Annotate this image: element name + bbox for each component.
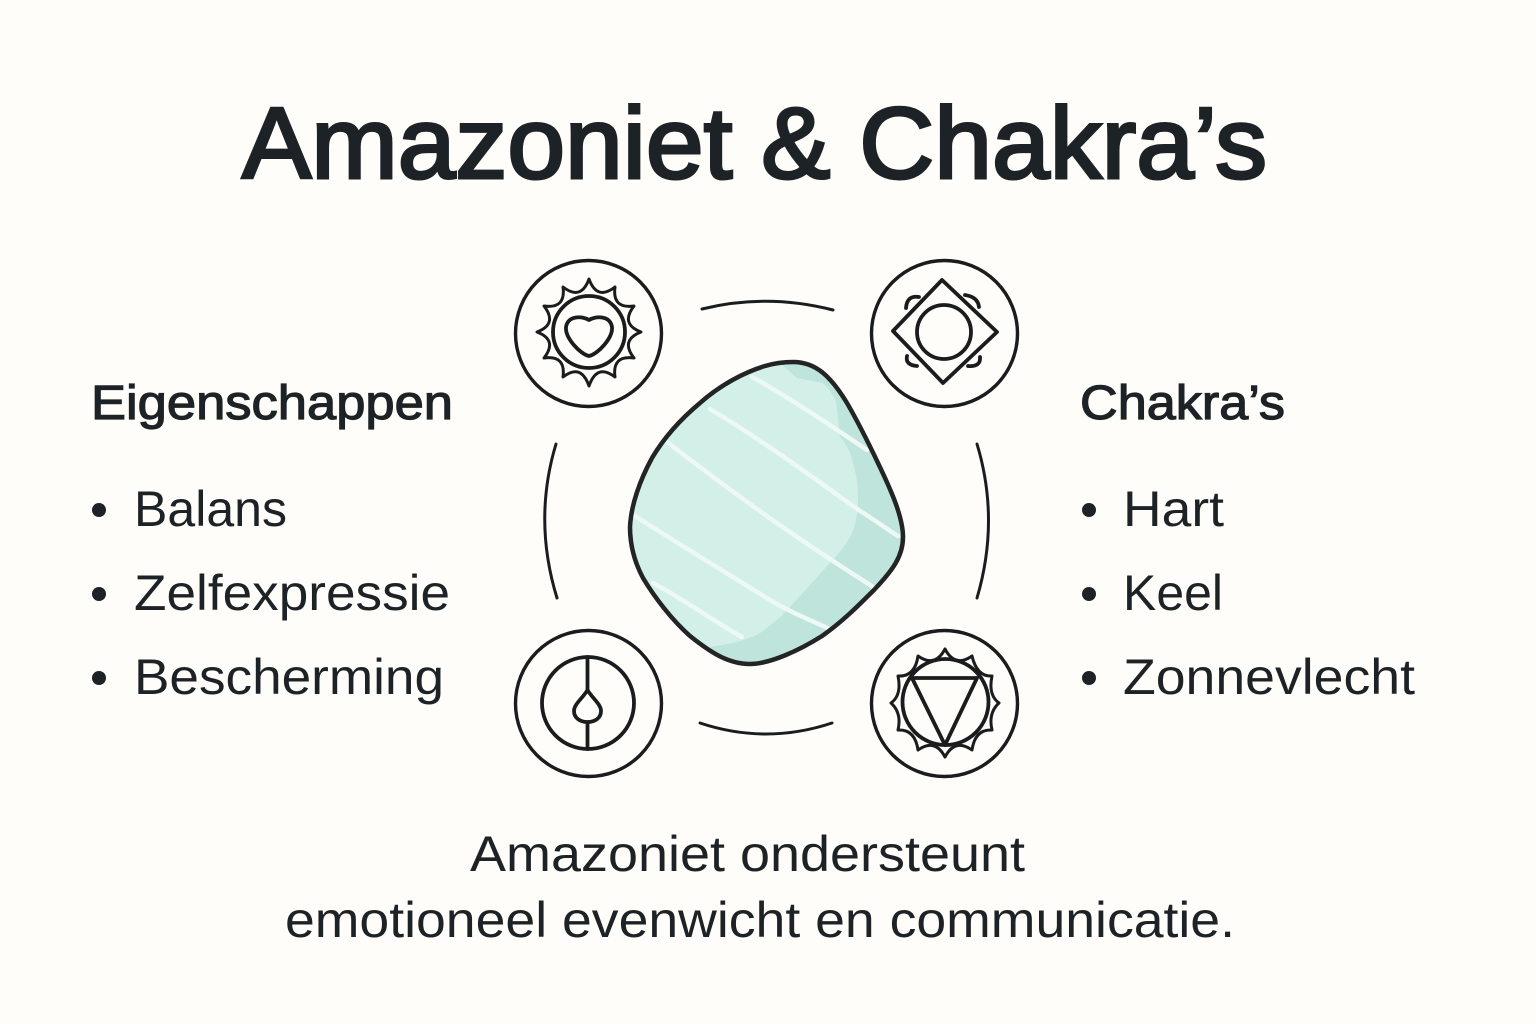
title: Amazoniet & Chakra’s [242, 88, 1267, 200]
arc: left connector [545, 444, 557, 598]
list item: keel: Keel [1123, 565, 1223, 621]
amazonite stone [630, 350, 920, 670]
list item: hart [1082, 481, 1224, 537]
icon: throat chakra [872, 260, 1018, 406]
icon: heart chakra [516, 260, 662, 406]
list item: zelfexpressie: Zelfexpressie [134, 565, 450, 621]
heading: chakra's: Chakra’s [1080, 377, 1285, 430]
arc: right connector [977, 444, 988, 598]
list item: balans: Balans [134, 481, 287, 537]
list item: hart: Hart [1123, 481, 1224, 537]
arc: bottom connector [700, 723, 832, 734]
arc: top connector [702, 301, 833, 310]
panel: eigenschappen [91, 377, 453, 705]
panel: chakra's [1080, 377, 1415, 705]
list item: zonnevlecht: Zonnevlecht [1123, 649, 1415, 705]
closing statement: emotioneel evenwicht en communicatie. [285, 892, 1235, 948]
icon: drop chakra [516, 630, 662, 776]
heading: eigenschappen: Eigenschappen [91, 377, 453, 430]
closing statement: Amazoniet ondersteunt [470, 826, 1025, 882]
icon: solar plexus chakra [872, 630, 1018, 776]
list item: bescherming: Bescherming [134, 649, 444, 705]
infographic canvas [92, 103, 1415, 938]
closing statement [285, 826, 1235, 948]
